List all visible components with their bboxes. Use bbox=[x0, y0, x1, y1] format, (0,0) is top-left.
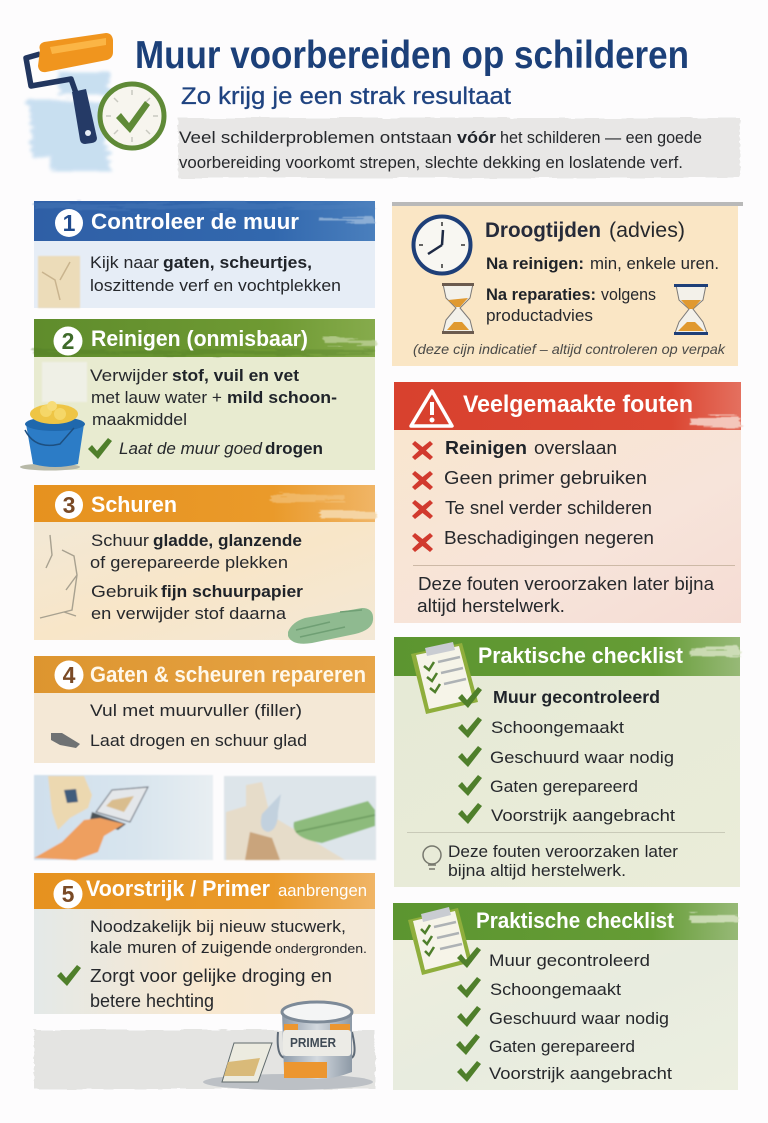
body text bbox=[90, 531, 303, 623]
tip text: Deze fouten veroorzaken later bbox=[448, 843, 679, 861]
body text: ondergronden. bbox=[275, 941, 367, 956]
body text: Gebruik bbox=[91, 582, 159, 601]
body text bbox=[90, 253, 341, 295]
panel: step 2 reinigen bbox=[20, 319, 375, 470]
icon: paint roller bbox=[26, 33, 113, 144]
drying after cleaning: min, enkele uren. bbox=[590, 254, 719, 273]
mistake list bbox=[412, 438, 654, 552]
icon: small scraper bbox=[51, 733, 80, 748]
body text bbox=[90, 701, 307, 750]
illustration: primer can and brush bbox=[34, 1002, 375, 1090]
check and benefit: Zorgt voor gelijke droging en bbox=[90, 966, 332, 986]
header section bbox=[26, 33, 740, 178]
panel: praktische checklist 2 bbox=[393, 903, 738, 1090]
icon: wall damage patch bbox=[38, 256, 80, 308]
panel: step 5 voorstrijk primer bbox=[34, 873, 375, 1014]
heading: (advies) bbox=[609, 219, 685, 242]
icon: clock bbox=[414, 216, 470, 274]
intro text: Veel schilderproblemen ontstaan bbox=[179, 128, 452, 147]
checklist items: Geschuurd waar nodig bbox=[490, 748, 674, 767]
body text: gladde, glanzende bbox=[153, 531, 302, 550]
intro text: het schilderen — een goede bbox=[500, 128, 702, 147]
panel: step 1 controleer de muur bbox=[34, 201, 375, 308]
body text: Vul met muurvuller (filler) bbox=[90, 701, 302, 720]
heading: Gaten & scheuren repareren bbox=[90, 662, 366, 687]
drying after repairs: Na reparaties: bbox=[486, 285, 596, 304]
badge 2: 2 bbox=[62, 328, 74, 354]
body text: met lauw water + bbox=[91, 388, 222, 407]
panel: droogtijden bbox=[392, 202, 743, 366]
title: Muur voorbereiden op schilderen bbox=[135, 34, 689, 77]
body text: gaten, scheurtjes, bbox=[163, 253, 312, 272]
badge 3: 3 bbox=[63, 492, 75, 518]
icon: primer can bbox=[278, 1002, 355, 1079]
icon: blue paint splash bbox=[30, 72, 110, 170]
check and drying note bbox=[88, 438, 323, 459]
mistake list: Geen primer gebruiken bbox=[444, 468, 647, 488]
heading bbox=[485, 219, 685, 242]
badge 4 bbox=[54, 660, 84, 690]
heading: Droogtijden bbox=[485, 219, 601, 242]
badge 5: 5 bbox=[62, 881, 75, 907]
closing note: Deze fouten veroorzaken later bijna bbox=[418, 574, 715, 594]
body text: loszittende verf en vochtplekken bbox=[90, 276, 341, 295]
drying after repairs: volgens bbox=[601, 285, 656, 304]
checklist items bbox=[456, 947, 672, 1083]
heading: Voorstrijk / Primer bbox=[86, 876, 270, 901]
footnote: (deze cijn indicatief – altijd controleren op verpak bbox=[413, 341, 726, 357]
checklist items: Muur gecontroleerd bbox=[489, 951, 650, 970]
subtitle: Zo krijg je een strak resultaat bbox=[181, 83, 511, 110]
checklist items: Voorstrijk aangebracht bbox=[489, 1064, 672, 1083]
icon: wall cracks bbox=[40, 535, 77, 618]
body text: Kijk naar bbox=[90, 253, 159, 272]
checklist items: Geschuurd waar nodig bbox=[489, 1009, 669, 1028]
mistake list: overslaan bbox=[534, 438, 617, 458]
icon: warning triangle bbox=[411, 391, 452, 426]
icon: clock check badge bbox=[100, 84, 164, 148]
panel: praktische checklist 1 bbox=[394, 637, 740, 887]
drying after repairs bbox=[486, 285, 656, 325]
panel: step 3 schuren bbox=[34, 485, 375, 644]
badge 4: 4 bbox=[63, 662, 76, 688]
badge 5 bbox=[54, 880, 82, 908]
body text bbox=[90, 366, 337, 429]
drying after repairs: productadvies bbox=[486, 306, 593, 325]
badge 2 bbox=[54, 326, 82, 356]
heading: Controleer de muur bbox=[91, 209, 299, 234]
drying after cleaning bbox=[486, 254, 719, 273]
badge 1 bbox=[55, 209, 83, 237]
body text: Laat drogen en schuur glad bbox=[90, 731, 307, 750]
body text: Schuur bbox=[91, 531, 149, 550]
icon: clipboard bbox=[411, 642, 478, 714]
check and drying note: Laat de muur goed bbox=[119, 439, 263, 458]
intro text: vóór bbox=[457, 128, 496, 147]
heading bbox=[86, 876, 367, 901]
body text: stof, vuil en vet bbox=[172, 366, 299, 385]
icon: light bulb bbox=[423, 846, 441, 869]
body text: fijn schuurpapier bbox=[161, 582, 303, 601]
check and benefit bbox=[57, 965, 332, 1011]
closing note bbox=[417, 574, 715, 616]
heading: Praktische checklist bbox=[476, 908, 674, 933]
closing note: altijd herstelwerk. bbox=[417, 596, 565, 616]
heading: aanbrengen bbox=[278, 882, 367, 900]
body text: Verwijder bbox=[90, 366, 168, 385]
body text: mild schoon- bbox=[227, 388, 337, 407]
body text: of gerepareerde plekken bbox=[90, 553, 288, 572]
checklist items: Muur gecontroleerd bbox=[493, 687, 660, 707]
illustration: filler knife and green cloth bbox=[224, 776, 376, 860]
drying after cleaning: Na reinigen: bbox=[486, 254, 584, 273]
checklist items bbox=[458, 687, 675, 825]
icon: bucket with sponges bbox=[20, 401, 85, 470]
icon: primer can: PRIMER bbox=[290, 1035, 337, 1050]
intro text: voorbereiding voorkomt strepen, slechte dekking en loslatende verf. bbox=[179, 153, 683, 172]
icon: green sanding block bbox=[288, 608, 373, 644]
body text: Noodzakelijk bij nieuw stucwerk, bbox=[90, 917, 346, 936]
checklist items: Gaten gerepareerd bbox=[489, 1037, 635, 1056]
icon: scraper with filler bbox=[222, 1043, 272, 1082]
checklist items: Voorstrijk aangebracht bbox=[491, 806, 675, 825]
heading: Praktische checklist bbox=[478, 643, 683, 668]
heading: Veelgemaakte fouten bbox=[463, 391, 693, 418]
checklist items: Schoongemaakt bbox=[491, 718, 624, 737]
heading: Reinigen (onmisbaar) bbox=[91, 326, 308, 351]
mistake list: Reinigen bbox=[445, 438, 527, 458]
checklist items: Gaten gerepareerd bbox=[490, 777, 638, 796]
heading: Schuren bbox=[91, 492, 177, 517]
icon: hourglass left bbox=[442, 283, 474, 334]
check and drying note: drogen bbox=[265, 439, 323, 458]
illustration: hand with scraper bbox=[34, 775, 213, 860]
badge 3 bbox=[55, 491, 83, 519]
checklist items: Schoongemaakt bbox=[490, 980, 621, 999]
badge 1: 1 bbox=[63, 210, 76, 236]
tip text bbox=[448, 843, 679, 880]
body text: en verwijder stof daarna bbox=[91, 604, 287, 623]
icon: hourglass right bbox=[674, 284, 708, 335]
icon: clipboard bbox=[408, 907, 472, 975]
mistake list: Beschadigingen negeren bbox=[444, 528, 654, 548]
body text: maakmiddel bbox=[92, 410, 187, 429]
body text bbox=[90, 917, 367, 957]
intro text bbox=[179, 128, 702, 172]
tip text: bijna altijd herstelwerk. bbox=[448, 862, 626, 880]
panel: veelgemaakte fouten bbox=[394, 382, 741, 623]
check and benefit: betere hechting bbox=[90, 991, 214, 1011]
body text: kale muren of zuigende bbox=[90, 938, 272, 957]
mistake list: Te snel verder schilderen bbox=[445, 498, 652, 518]
panel: step 4 gaten en scheuren bbox=[34, 656, 375, 763]
